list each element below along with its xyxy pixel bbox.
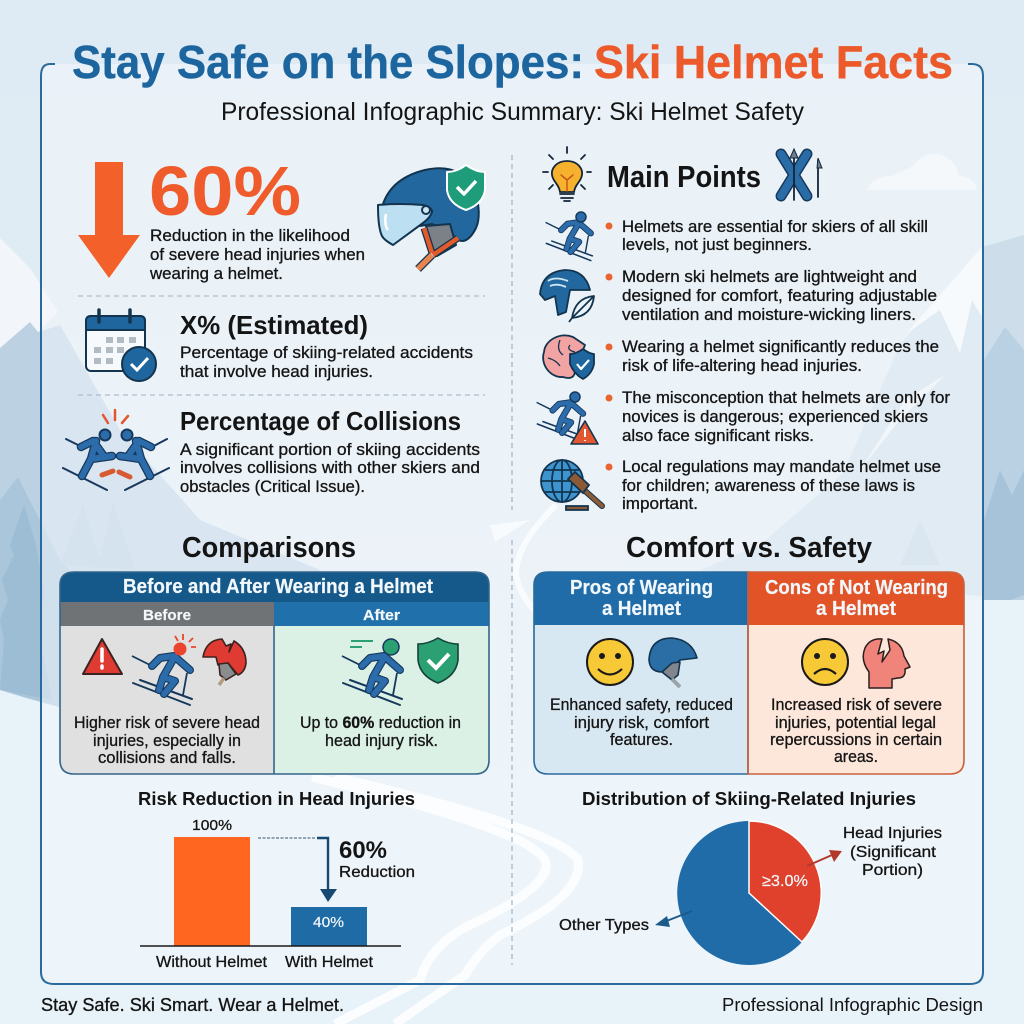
text: before description: injuries, especially in [93,732,241,750]
cons heading [765,577,948,620]
point 4: The misconception that helmets are only for [622,389,951,407]
point 5: Local regulations may mandate helmet use [622,458,941,476]
heading: X% estimated: X% (Estimated) [180,310,368,340]
text: before description: collisions and falls. [98,749,236,767]
text: cons description: areas. [834,748,878,766]
table title: Before and After Wearing a Helmet [123,576,433,598]
pros heading [570,577,713,620]
text: after description: head injury risk. [325,732,438,750]
stat: collisions [63,406,480,496]
point 4: also face significant risks. [622,427,814,445]
cons heading: a Helmet [816,598,896,620]
footer left: Stay Safe. Ski Smart. Wear a Helmet. [41,995,344,1015]
icon: broken helmet [203,639,246,685]
heading: percentage of collisions: Percentage of Collisions [180,406,461,436]
point 1: levels, not just beginners. [622,236,812,254]
title [72,36,953,88]
text: 60% description: Reduction in the likelihood [150,227,350,245]
label: 60% reduction: 60% [339,837,387,864]
subtitle: Professional Infographic Summary: Ski Helmet Safety [221,98,804,126]
label: head injuries [843,825,942,879]
text: pros description: features. [610,731,673,749]
heading: comparisons: Comparisons [182,532,356,564]
point 3: risk of life-altering head injuries. [622,357,862,375]
heading: main points: Main Points [607,159,761,194]
icon: smiley [587,639,633,685]
pie chart: injury distribution [559,821,942,965]
stat: X% estimated [86,310,473,381]
icon: helmet with shield [378,165,485,269]
point 2: ventilation and moisture-wicking liners. [622,306,916,324]
text: collisions description: involves collisions with other skiers and [180,459,480,477]
icon: injured head [863,639,910,688]
icon: blue helmet [649,638,697,687]
decorative ski tracks and cloud [312,154,977,1024]
point 5: for children; awareness of these laws is [622,477,915,495]
label: head injuries: Head Injuries [843,825,942,842]
text: 60% description: of severe head injuries when [150,246,365,264]
label: head injuries: Portion) [862,862,923,879]
arrow: downward reduction [78,162,140,278]
text: X% description: Percentage of skiing-related accidents [180,344,473,362]
point 4 [537,389,951,445]
pros heading: Pros of Wearing [570,577,713,599]
text: cons description: Increased risk of severe [771,696,942,714]
text: X% description [180,344,473,381]
label: other types: Other Types [559,917,649,934]
text: cons description [770,696,942,766]
point 2 [540,268,937,324]
icon: skier with head injury [132,634,196,705]
value: 3.0%: ≥3.0% [762,873,808,890]
big stat: 60%: 60% [149,152,301,230]
title: Ski Helmet Facts [594,36,953,88]
panel: pros and cons table [534,572,964,774]
cons heading: Cons of Not Wearing [765,577,948,599]
bar chart: risk reduction [140,817,415,971]
icon: crossed skis and poles [781,149,822,200]
point 2: Modern ski helmets are lightweight and [622,268,917,286]
column heading: after: After [363,607,400,624]
bar: without helmet [174,837,250,946]
icon: colliding skiers [63,410,169,490]
pros heading: a Helmet [602,598,681,620]
column heading: before: Before [143,607,191,624]
chart title: risk reduction: Risk Reduction in Head Injuries [138,788,415,809]
bullet list [537,212,951,513]
arrow: other types [655,911,692,927]
point 5: important. [622,495,698,513]
panel: key statistics [63,152,485,496]
icon: calendar with check [86,310,156,381]
text: after description [300,714,461,750]
chart title: injury distribution: Distribution of Skiing-Related Injuries [582,788,916,809]
point 4: novices is dangerous; experienced skiers [622,408,928,426]
text: collisions description: A significant portion of skiing accidents [180,441,480,459]
point 2: designed for comfort, featuring adjustable [622,287,937,305]
text: before description [74,714,260,767]
axis labels: With Helmet [285,954,374,971]
text: collisions description [180,441,480,496]
arrow: head injuries [807,850,842,866]
icon: sad face [802,639,848,685]
slice: head injuries [749,821,821,942]
text: X% description: that involve head injuries. [180,363,373,381]
point 5 [541,458,941,513]
text: pros description [550,696,733,749]
point 3 [543,335,939,379]
axis labels: Without Helmet [156,954,268,971]
heading: comfort vs safety: Comfort vs. Safety [626,532,872,564]
label: head injuries: (Significant [850,844,937,861]
text: pros description: injury risk, comfort [574,714,709,732]
bar: with helmet [291,907,367,946]
value: 100%: 100% [192,817,232,834]
text: 60% description: wearing a helmet. [149,265,283,283]
axis labels [156,954,374,971]
point 3: Wearing a helmet significantly reduces the [622,338,939,356]
value: 40%: 40% [313,914,344,931]
icon: light bulb [543,147,591,201]
text: after description: Up to 60% reduction in [300,714,461,732]
icon: warning triangle [83,639,122,674]
footer right: Professional Infographic Design [722,995,983,1015]
title: Stay Safe on the Slopes: [72,36,584,88]
text: cons description: injuries, potential legal [775,714,936,732]
arrow: reduction [258,838,337,902]
text: before description: Higher risk of severe head [74,714,260,732]
text: pros description: Enhanced safety, reduced [550,696,733,714]
label: 60% reduction: Reduction [339,864,415,881]
label: 60% reduction [339,837,415,881]
point 1: Helmets are essential for skiers of all skill [622,218,928,236]
panel: before and after table [60,572,489,774]
panel: main points [537,147,951,513]
point 1 [546,212,928,261]
icon: green shield check [418,638,458,683]
icon: skier with helmet [342,639,402,705]
text: collisions description: obstacles (Critical Issue). [180,478,365,496]
text: cons description: repercussions in certain [770,731,942,749]
text: 60% description [149,227,365,283]
slice: other types [677,821,802,965]
